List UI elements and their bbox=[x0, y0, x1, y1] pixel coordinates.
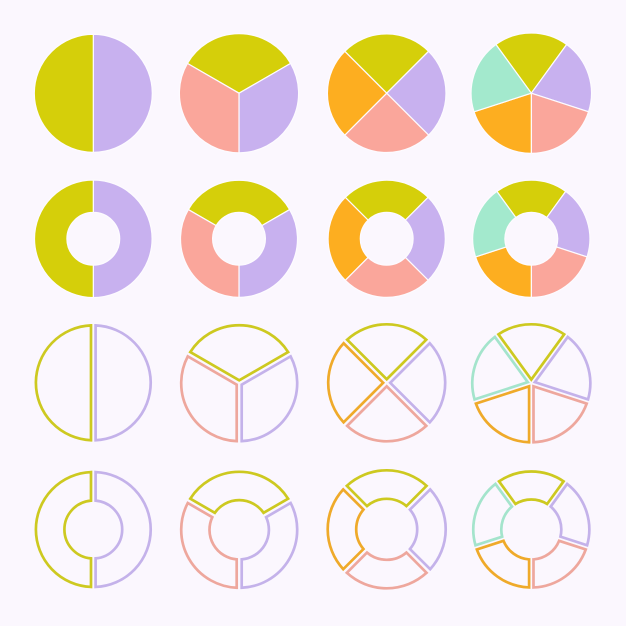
outlined pie: 2 segments bbox=[36, 325, 151, 440]
outlined donut: 3 segments bbox=[165, 472, 314, 601]
row 3: outlined pie charts bbox=[36, 324, 598, 455]
donut: 2 segments bbox=[35, 180, 152, 298]
outlined pie: 5 segments bbox=[465, 324, 598, 450]
row 2: filled donut charts bbox=[35, 180, 598, 312]
pie: 2 segments bbox=[34, 34, 152, 152]
pie: 5 segments bbox=[463, 33, 599, 163]
donut: 3 segments bbox=[163, 180, 315, 312]
donut: 4 segments bbox=[328, 180, 445, 297]
outlined donut: 4 segments bbox=[328, 470, 446, 588]
pie: 4 segments bbox=[327, 34, 446, 152]
pie: 3 segments bbox=[162, 34, 316, 168]
outlined pie: 4 segments bbox=[328, 324, 445, 441]
outlined donut: 2 segments bbox=[36, 472, 151, 587]
outlined donut: 5 segments bbox=[466, 472, 596, 595]
donut: 5 segments bbox=[465, 180, 598, 306]
row 1: filled pie charts bbox=[34, 33, 599, 168]
outlined pie: 3 segments bbox=[165, 325, 314, 455]
row 4: outlined donut charts bbox=[36, 470, 596, 601]
